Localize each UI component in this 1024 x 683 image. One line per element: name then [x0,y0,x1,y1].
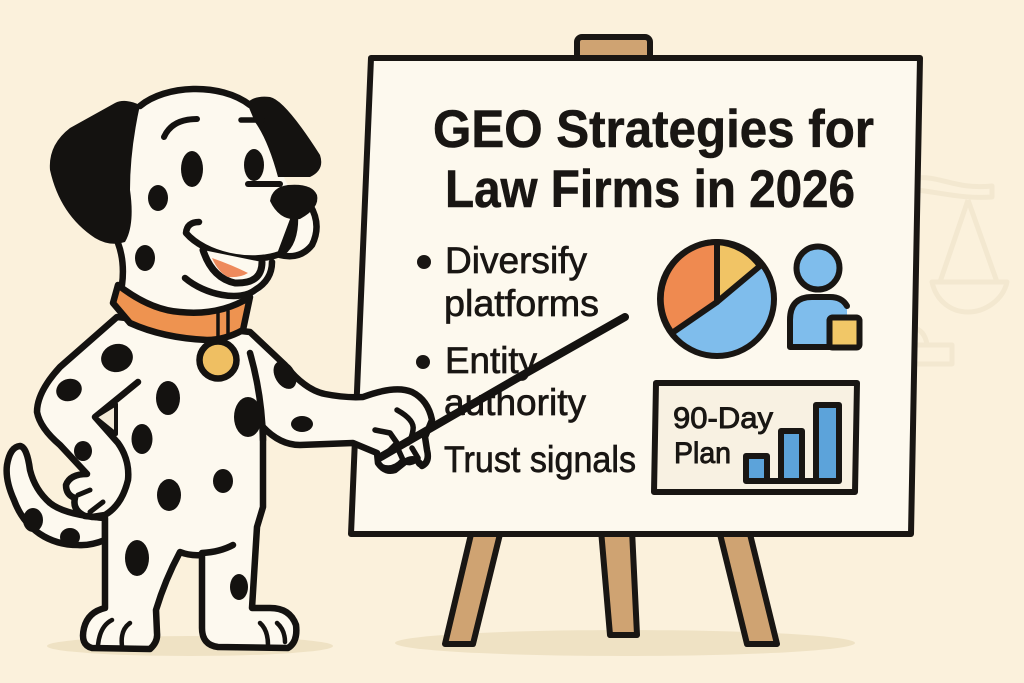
tongue [212,258,248,277]
title: Law Firms in 2026 [445,160,855,219]
face spots [135,149,264,271]
arm gap triangle [95,404,116,434]
easel top peg [577,37,650,67]
inner left arm [92,382,138,517]
presentation board [351,58,920,534]
90-day plan box [654,383,857,492]
ground shadow under easel [395,630,855,656]
bullet: diversify platforms: platforms [444,283,599,324]
muzzle and smile [186,218,295,258]
collar buckle [218,311,228,337]
bullet: entity authority [416,340,586,423]
faint scales of justice icon [910,178,1007,364]
easel left leg [445,530,501,644]
body spots [53,340,313,600]
jowl [280,205,317,256]
toe lines [98,620,285,646]
eye line [248,181,280,187]
dog [7,89,432,649]
right ear [247,97,321,177]
hand fingers on hip [78,490,103,512]
bullet: diversify platforms [417,240,599,324]
bullet: diversify platforms: Diversify [445,240,587,281]
brow [164,119,197,137]
bullet: entity authority: Entity [445,340,537,381]
ground shadow under dog [47,636,333,656]
icon: person with box [790,246,860,348]
plan label: 90-Day [673,402,773,435]
plan label: Plan [674,437,731,470]
bar chart [746,405,839,481]
easel right leg [719,530,777,644]
paw fingers over pointer [375,410,418,468]
bullet: trust signals: Trust signals [444,439,636,480]
head outline [118,89,250,285]
left ear [50,101,140,244]
belly and inner leg lines [202,353,263,553]
pointer stick [379,317,625,458]
head [118,89,295,312]
bullet list [415,240,636,480]
easel [445,37,777,644]
nose [270,185,317,219]
collar [113,285,250,340]
title: GEO Strategies for [433,100,874,159]
tail [7,446,105,546]
mouth [203,250,262,283]
bullet: entity authority: authority [444,382,586,423]
body, legs and pointing arm [37,317,432,649]
brow stub [241,117,262,123]
title [433,100,874,219]
easel centre leg [601,530,637,635]
pie chart [660,242,774,356]
tag [200,342,236,378]
jaw [185,262,272,296]
